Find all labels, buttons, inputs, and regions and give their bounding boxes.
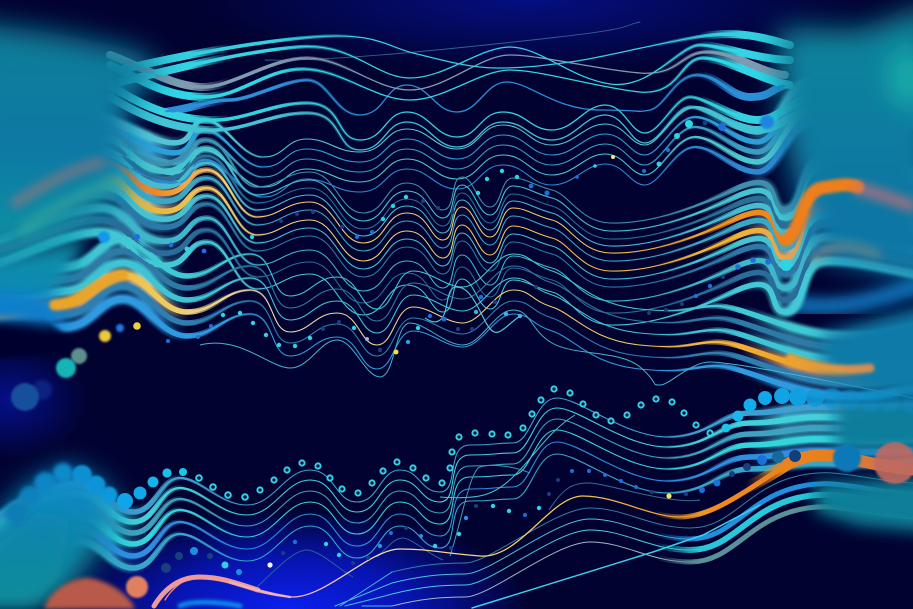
orange and pink lead line [165,455,913,600]
dark trim under left mass [0,318,100,360]
pink streak [12,162,105,205]
gold ribbon left [55,275,123,305]
highlight dots [267,155,672,568]
dim navy dots [161,121,801,573]
gold ribbon low right [790,358,870,370]
low trough line [200,310,913,398]
small blue dots [134,115,774,575]
ribbon mid width [110,34,820,150]
bright blue base band [180,602,240,606]
orange ribbon right [785,185,858,240]
pink thick lead [154,577,258,606]
ribbon thick ends [106,30,794,134]
top ribbon lines [110,22,820,150]
pale gold ribbon right [812,246,880,262]
upper wave band, thin centre lines [0,72,913,398]
solid dots growing to the left [5,463,187,525]
ring dots along bottom band [196,386,713,500]
spike line [425,287,520,332]
blue lower edge [0,292,70,325]
pale teal streak [20,180,125,232]
bottom-right teal overlay [815,478,913,533]
right teal mass [835,396,913,454]
panel: blurred bottom wave masses [0,396,913,609]
salmon blur shape [44,578,135,609]
bokeh dots lower left [11,231,141,411]
pink tail right [855,188,913,207]
faint diagonal [265,22,640,60]
panel: blurred right wave mass [778,5,913,398]
panel: blurred right wave base [790,283,913,306]
small cyan dots [184,120,792,568]
panel: blurred left wave mass [0,22,165,325]
thin rising lines [440,415,575,498]
ribbon thin lines [110,34,820,150]
solid dots growing to the right [722,388,913,432]
lower fan lines and bright diagonal [154,455,913,608]
bright teal glow [888,48,913,108]
bokeh dots lower right and bottom [126,442,913,598]
upper wave band, thick outer ends [0,72,913,396]
bottom wave band [0,398,913,587]
fan line ends [335,572,392,606]
